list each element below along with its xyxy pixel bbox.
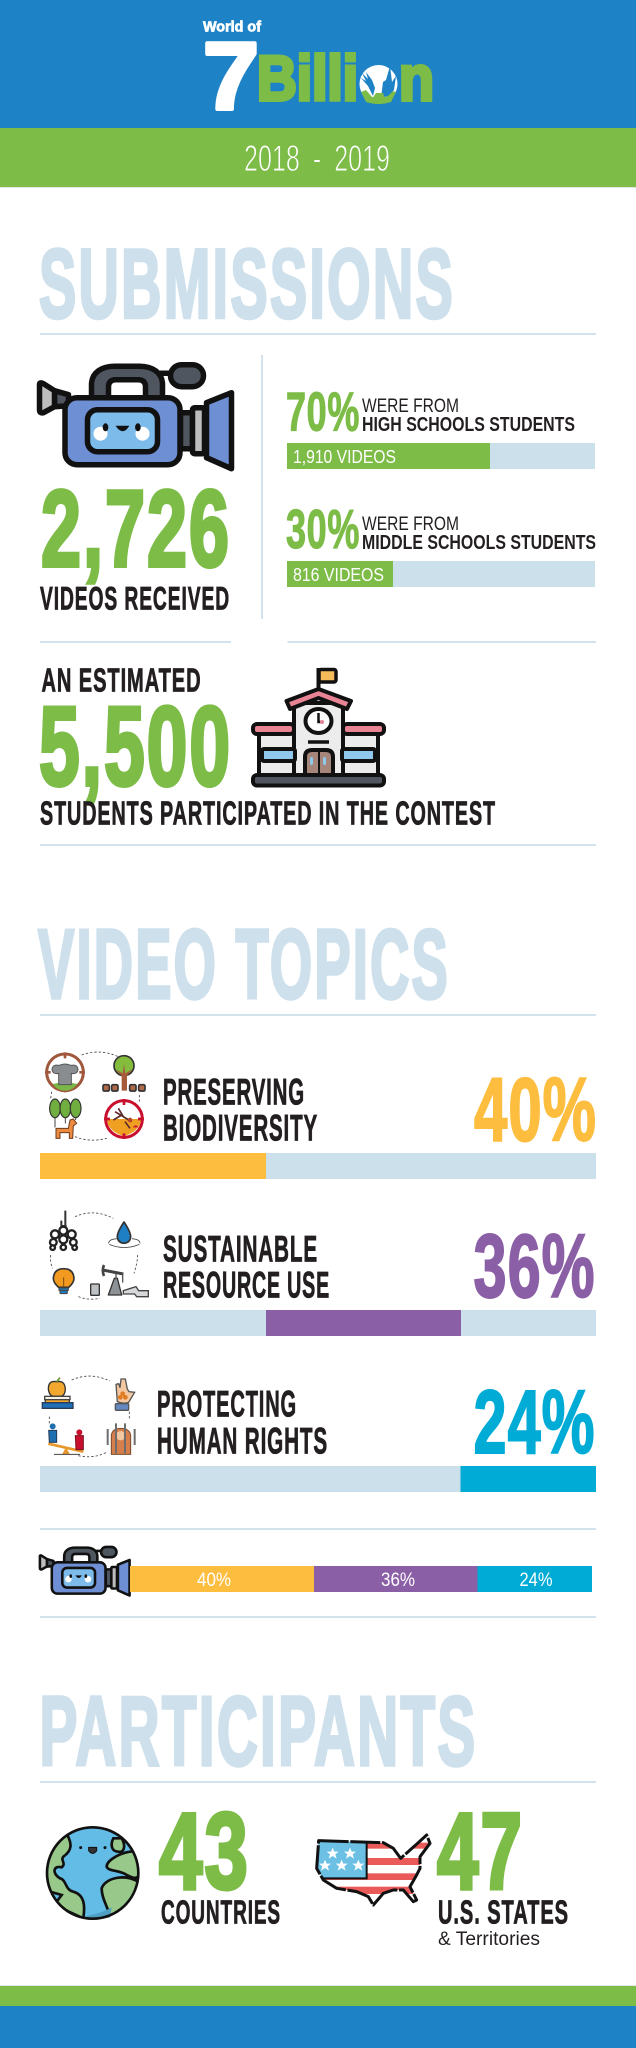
panel: video topics (38, 909, 597, 1618)
icon: small video camera (40, 1547, 130, 1596)
bar: 36% (40, 1310, 596, 1336)
stat: 47: 47 (437, 1790, 524, 1912)
percent: 70%: 70% (286, 380, 360, 442)
segment: 40% (130, 1566, 314, 1592)
bar: 24% (40, 1466, 596, 1492)
label: human rights: HUMAN RIGHTS (157, 1420, 328, 1462)
icon: usa flag map (313, 1833, 433, 1910)
bar: 1,910 videos: 1,910 VIDEOS (293, 447, 396, 467)
segment: 36% (314, 1566, 478, 1592)
bar: 816 videos (287, 561, 595, 587)
bar: 816 videos: 816 VIDEOS (293, 565, 384, 585)
icon cluster: resources (50, 1211, 148, 1299)
icon: globe (43, 1827, 142, 1919)
logo numeral 7: 7 (203, 23, 259, 130)
label: sustainable: SUSTAINABLE (163, 1228, 318, 1270)
segment: 24%: 24% (520, 1570, 553, 1591)
segment: 24% (478, 1566, 592, 1592)
header (0, 0, 636, 130)
logo text: n: n (399, 44, 434, 114)
year text: 2018 - 2019 (244, 138, 390, 179)
label: and territories: & Territories (438, 1928, 540, 1950)
label: resource use: RESOURCE USE (163, 1264, 330, 1306)
year banner (0, 128, 636, 188)
panel: submissions (39, 228, 596, 846)
topic: protecting human rights (40, 1373, 596, 1492)
icon cluster: human rights (42, 1376, 135, 1457)
text: were from: WERE FROM (362, 514, 459, 535)
logo (203, 20, 434, 130)
topic: preserving biodiversity (40, 1052, 597, 1179)
icon cluster: biodiversity (45, 1052, 145, 1140)
label: biodiversity: BIODIVERSITY (163, 1106, 318, 1148)
logo icon: hands in globe (360, 65, 398, 104)
topic: sustainable resource use (40, 1211, 596, 1336)
segment: 36%: 36% (381, 1570, 415, 1591)
text: high schools students: HIGH SCHOOLS STUDENTS (362, 414, 575, 436)
icon: school building (253, 668, 384, 786)
stat: 43: 43 (159, 1790, 250, 1912)
label: countries: COUNTRIES (161, 1894, 281, 1930)
text: an estimated: AN ESTIMATED (42, 662, 202, 700)
text: were from: WERE FROM (362, 396, 459, 417)
logo text: Billi: Billi (257, 44, 358, 114)
bar: 40% (40, 1153, 596, 1179)
icon: video camera (40, 365, 232, 469)
stat: 5,500: 5,500 (39, 684, 232, 809)
logo text: World of: World of (203, 20, 261, 36)
label: preserving: PRESERVING (163, 1070, 305, 1112)
label: protecting: PROTECTING (157, 1382, 297, 1424)
stat: middle school share (286, 498, 596, 587)
stat: high school share (286, 380, 595, 469)
panel: participants (40, 1676, 596, 1950)
label: videos received: VIDEOS RECEIVED (40, 580, 230, 616)
summary: stacked bar (40, 1547, 592, 1596)
footer bands (0, 1985, 636, 2048)
bar: 1,910 videos (287, 443, 595, 469)
percent: 30%: 30% (286, 498, 360, 560)
stat: 2,726: 2,726 (41, 468, 231, 590)
segment: 40%: 40% (197, 1570, 231, 1591)
